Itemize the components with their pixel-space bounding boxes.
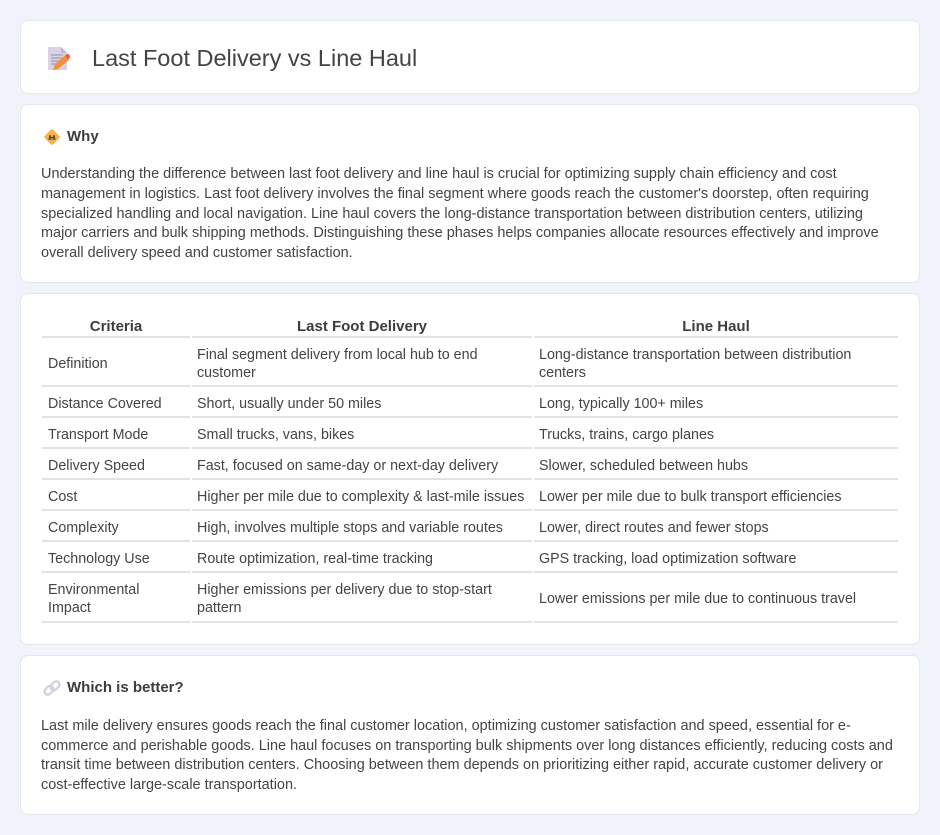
- icon: document with pencil: [48, 47, 70, 70]
- row: definition: customer: [197, 365, 256, 381]
- row: complexity: [48, 520, 769, 536]
- row: definition: Definition: [48, 356, 108, 372]
- row: transport mode: Transport Mode: [48, 427, 148, 443]
- row: transport mode: Small trucks, vans, bikes: [197, 427, 354, 443]
- row: environmental impact: Environmental: [48, 582, 139, 598]
- table header: Line Haul: [682, 318, 750, 335]
- row: delivery speed: Delivery Speed: [48, 458, 145, 474]
- text block: why: specialized handling and local navigation. Line haul covers the long-distance transportation between distribution centers, utilizing: [41, 206, 863, 222]
- row: environmental impact: pattern: [197, 600, 242, 616]
- row: complexity: High, involves multiple stops and variable routes: [197, 520, 503, 536]
- row: technology use: Route optimization, real-time tracking: [197, 551, 433, 567]
- text block: which is better: commerce and perishable goods. Line haul focuses on transporting bulk shipments over long distances efficiently, reducing costs and: [41, 738, 893, 754]
- heading: which is better: Which is better?: [67, 679, 184, 696]
- text block: why: overall delivery speed and customer satisfaction.: [41, 245, 353, 261]
- row: environmental impact: [48, 582, 856, 616]
- table header: [90, 318, 750, 335]
- row: technology use: Technology Use: [48, 551, 150, 567]
- row: technology use: [48, 551, 796, 567]
- panel: title card: [20, 20, 920, 94]
- row: complexity: Complexity: [48, 520, 119, 536]
- title: Last Foot Delivery vs Line Haul: [92, 45, 417, 71]
- row: distance covered: Distance Covered: [48, 396, 162, 412]
- text block: why: major carriers and bulk shipping methods. Distinguishing these phases helps companies allocate resources effectively and improve: [41, 225, 879, 241]
- text block: which is better: transit time between distribution centers. Choosing between them depends on prioritizing either rapid, accurate customer delivery or: [41, 757, 883, 773]
- row: cost: Cost: [48, 489, 77, 505]
- panel: comparison table: [20, 293, 920, 645]
- text block: which is better: Last mile delivery ensures goods reach the final customer location, optimizing customer satisfaction and speed, essential for e-: [41, 718, 851, 734]
- row: cost: Higher per mile due to complexity & last-mile issues: [197, 489, 524, 505]
- table header: Criteria: [90, 318, 142, 335]
- row: distance covered: [48, 396, 703, 412]
- row: definition: [48, 347, 851, 381]
- row: distance covered: Long, typically 100+ miles: [539, 396, 703, 412]
- text block: which is better: [41, 718, 893, 793]
- row: transport mode: [48, 427, 714, 443]
- text block: why: Understanding the difference between last foot delivery and line haul is crucial for optimizing supply chain efficiency and cost: [41, 166, 837, 182]
- text block: which is better: cost-effective large-scale transportation.: [41, 777, 297, 793]
- icon: link: [44, 680, 60, 696]
- heading: why: Why: [67, 128, 99, 145]
- row: technology use: GPS tracking, load optimization software: [539, 551, 796, 567]
- row: transport mode: Trucks, trains, cargo planes: [539, 427, 714, 443]
- row: definition: Final segment delivery from local hub to end: [197, 347, 478, 363]
- row: delivery speed: Slower, scheduled between hubs: [539, 458, 748, 474]
- panel: which is better: [20, 655, 920, 815]
- text block: why: [41, 166, 879, 261]
- row: cost: Lower per mile due to bulk transport efficiencies: [539, 489, 842, 505]
- text block: why: management in logistics. Last foot delivery involves the final segment where goods reach the customer's doorstep, often requiring: [41, 186, 869, 202]
- row: environmental impact: Impact: [48, 600, 91, 616]
- row: delivery speed: [48, 458, 748, 474]
- row: environmental impact: Lower emissions per mile due to continuous travel: [539, 591, 856, 607]
- row: environmental impact: Higher emissions per delivery due to stop-start: [197, 582, 492, 598]
- row: definition: centers: [539, 365, 586, 381]
- icon: warning diamond: [44, 129, 60, 145]
- row: definition: Long-distance transportation between distribution: [539, 347, 851, 363]
- row: delivery speed: Fast, focused on same-day or next-day delivery: [197, 458, 498, 474]
- table header: Last Foot Delivery: [297, 318, 427, 335]
- comparison table: [42, 318, 898, 623]
- panel: why: [20, 104, 920, 283]
- row: complexity: Lower, direct routes and fewer stops: [539, 520, 769, 536]
- row: cost: [48, 489, 842, 505]
- row: distance covered: Short, usually under 50 miles: [197, 396, 381, 412]
